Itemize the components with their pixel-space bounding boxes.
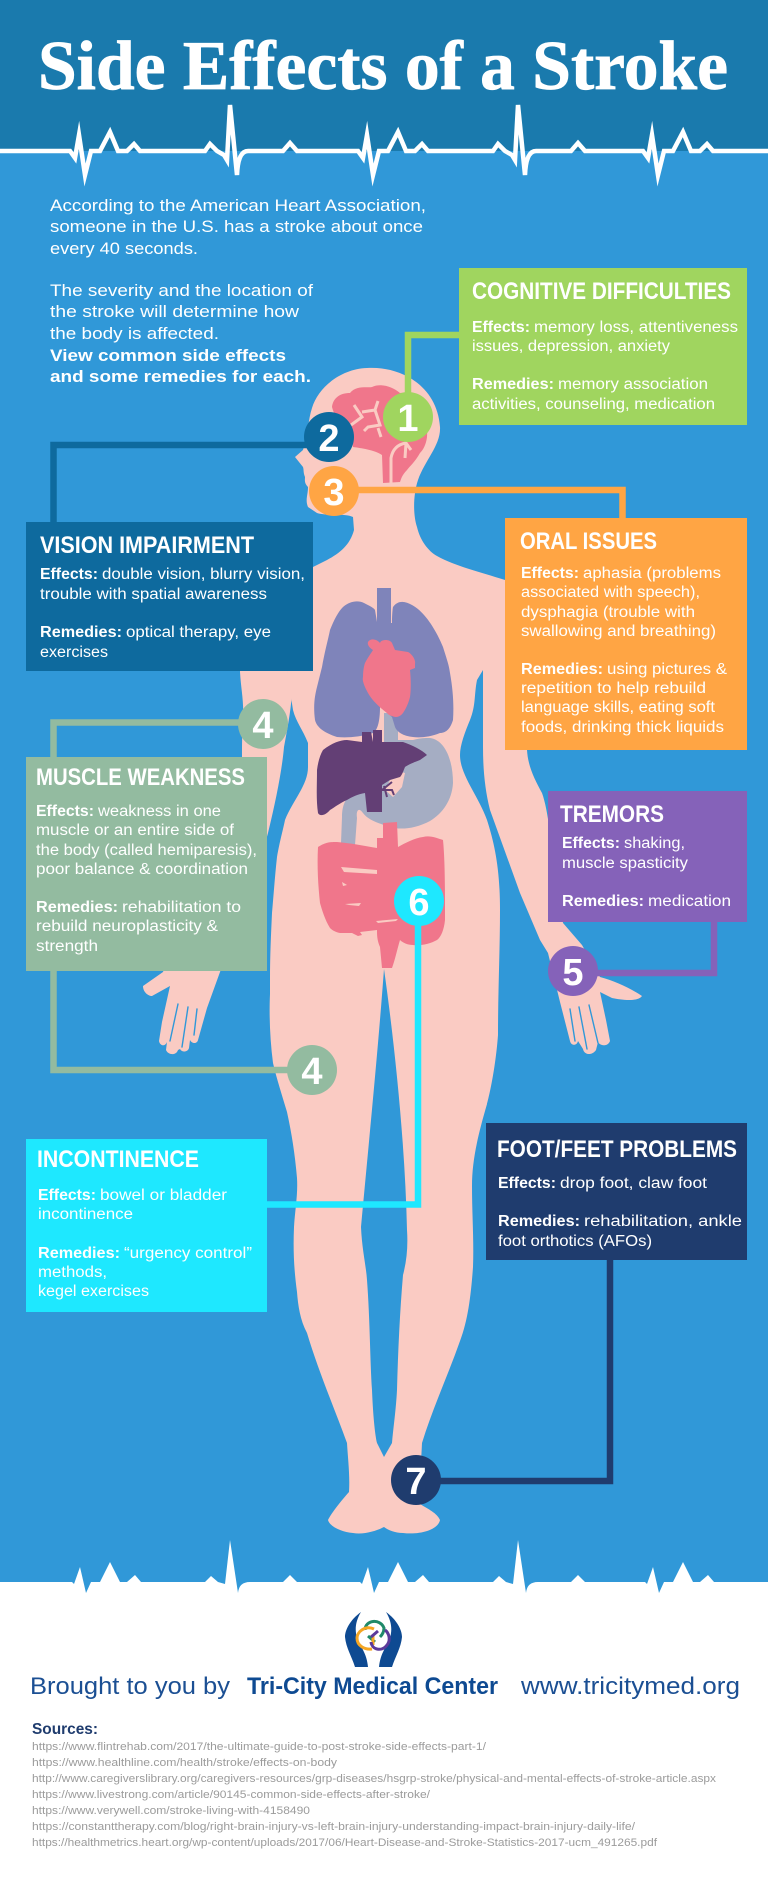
torso, head and legs [270, 368, 505, 1533]
text: effects and remedies: memory association [558, 376, 708, 393]
heartbeat line [0, 105, 768, 175]
header band [0, 0, 768, 151]
intro text: someone in the U.S. has a stroke about once [50, 217, 423, 236]
intro text: According to the American Heart Association, [50, 196, 426, 215]
text: effects and remedies: muscle spasticity [562, 855, 688, 872]
heading: COGNITIVE DIFFICULTIES [472, 278, 731, 305]
left arm [143, 572, 330, 1054]
text: effects and remedies: shaking, [624, 835, 685, 852]
sources: https://www.livestrong.com/article/90145-common-side-effects-after-stroke/ [32, 1789, 431, 1801]
sources: https://constanttherapy.com/blog/right-brain-injury-vs-left-brain-injury-understanding-impact-brain-injury-daily-life/ [32, 1821, 636, 1833]
text: effects and remedies: Effects: [472, 319, 530, 336]
number marker 6: 6 [408, 882, 430, 924]
text: effects and remedies: Remedies: [562, 893, 644, 910]
heading: ORAL ISSUES [520, 528, 657, 555]
sources: https://healthmetrics.heart.org/wp-content/uploads/2017/06/Heart-Disease-and-Stroke-Statistics-2017-ucm_491265.pdf [32, 1837, 658, 1849]
organs [314, 588, 453, 968]
number marker 1: 1 [397, 398, 419, 440]
text: effects and remedies: Remedies: [472, 376, 554, 393]
intro text: the stroke will determine how [50, 302, 300, 321]
text: effects and remedies: Remedies: [521, 661, 603, 678]
text: effects and remedies: incontinence [38, 1206, 133, 1223]
heading: INCONTINENCE [37, 1146, 199, 1173]
text: effects and remedies: swallowing and breathing) [521, 623, 716, 640]
text: effects and remedies: repetition to help rebuild [521, 680, 706, 697]
heading: VISION IMPAIRMENT [40, 532, 254, 559]
number marker 6 [394, 876, 444, 926]
text: effects and remedies: exercises [40, 644, 108, 661]
text: effects and remedies: using pictures & [607, 661, 728, 678]
heart [363, 639, 415, 717]
text: effects and remedies [40, 566, 305, 661]
heading: TREMORS [560, 801, 664, 828]
sources [32, 1721, 717, 1849]
text: effects and remedies: “urgency control” [124, 1245, 252, 1262]
sources: Sources: [32, 1721, 98, 1738]
panel: tremors [548, 791, 747, 922]
intro text: and some remedies for each. [50, 367, 311, 386]
text: effects and remedies: activities, counseling, medication [472, 396, 715, 413]
text: effects and remedies: rebuild neuroplasticity & [36, 918, 219, 935]
text: effects and remedies: trouble with spatial awareness [40, 586, 267, 603]
title: Side Effects of a Stroke [38, 28, 728, 105]
text: effects and remedies [36, 803, 257, 955]
text: effects and remedies: rehabilitation, ankle [584, 1213, 742, 1230]
text: effects and remedies: dysphagia (trouble with [521, 604, 695, 621]
number marker 7: 7 [405, 1461, 427, 1503]
text: effects and remedies: Effects: [40, 566, 98, 583]
text: effects and remedies: foot orthotics (AFOs) [498, 1233, 652, 1250]
sources: https://www.verywell.com/stroke-living-with-4158490 [32, 1805, 310, 1817]
text: effects and remedies: optical therapy, eye [126, 624, 271, 641]
heading: MUSCLE WEAKNESS [36, 764, 245, 791]
footer white area with heartbeat edge [0, 1540, 768, 1878]
text: effects and remedies: medication [648, 893, 731, 910]
text: effects and remedies [38, 1187, 252, 1300]
panel: oral issues [505, 518, 747, 750]
text: effects and remedies: Remedies: [38, 1245, 120, 1262]
text: effects and remedies: memory loss, attentiveness [534, 319, 738, 336]
text: effects and remedies: aphasia (problems [583, 565, 721, 582]
number marker 7 [391, 1455, 441, 1505]
text: effects and remedies: Effects: [36, 803, 94, 820]
brought to you by text: Brought to you by [30, 1673, 230, 1700]
number marker 5: 5 [562, 952, 584, 994]
organization name: Tri-City Medical Center [247, 1673, 498, 1700]
panel: incontinence [26, 1139, 267, 1312]
text: effects and remedies: issues, depression, anxiety [472, 338, 670, 355]
text: effects and remedies: kegel exercises [38, 1283, 149, 1300]
sources: http://www.caregiverslibrary.org/caregivers-resources/grp-diseases/hsgrp-stroke/physical-and-mental-effects-of-stroke-article.aspx [32, 1773, 717, 1785]
number marker 4 upper [238, 699, 288, 749]
text: effects and remedies: drop foot, claw foot [560, 1175, 708, 1192]
number marker 2 [304, 412, 354, 462]
stomach and intestine tube [341, 713, 453, 845]
text: effects and remedies: double vision, blurry vision, [102, 566, 305, 583]
text: effects and remedies [498, 1175, 742, 1250]
text: effects and remedies: associated with speech), [521, 584, 700, 601]
sources: https://www.flintrehab.com/2017/the-ultimate-guide-to-post-stroke-side-effects-part-1/ [32, 1741, 487, 1753]
pink gap near stomach [385, 770, 405, 797]
number marker 3 [309, 466, 359, 516]
intro text: View common side effects [50, 346, 286, 365]
text: effects and remedies: Effects: [38, 1187, 96, 1204]
heading: FOOT/FEET PROBLEMS [497, 1136, 737, 1163]
sources: https://www.healthline.com/health/stroke/effects-on-body [32, 1757, 338, 1769]
panel: muscle weakness [26, 757, 267, 971]
text: effects and remedies: Remedies: [40, 624, 122, 641]
intro text: the body is affected. [50, 324, 219, 343]
text: effects and remedies: Effects: [521, 565, 579, 582]
right arm [450, 575, 642, 1054]
brain [332, 385, 428, 483]
website: www.tricitymed.org [520, 1673, 740, 1700]
text: effects and remedies: weakness in one [97, 803, 221, 820]
text: effects and remedies: Remedies: [36, 899, 118, 916]
number marker 4 upper: 4 [252, 705, 274, 747]
text: effects and remedies: language skills, eating soft [521, 699, 716, 716]
intro text: every 40 seconds. [50, 239, 198, 258]
number marker 5 [548, 946, 598, 996]
text: effects and remedies: Effects: [498, 1175, 556, 1192]
text: effects and remedies [521, 565, 728, 736]
text: effects and remedies: strength [36, 938, 98, 955]
finger gaps [170, 1004, 598, 1049]
text: effects and remedies [562, 835, 731, 910]
connector lines [54, 335, 714, 1481]
number marker 4 lower [287, 1045, 337, 1095]
intro text [50, 196, 426, 386]
text: effects and remedies: Effects: [562, 835, 620, 852]
panel: vision impairment [26, 522, 313, 671]
number marker 1 [383, 392, 433, 442]
intestines [318, 822, 445, 968]
panel: foot/feet problems [486, 1123, 747, 1260]
text: effects and remedies: rehabilitation to [122, 899, 241, 916]
text: effects and remedies: Remedies: [498, 1213, 580, 1230]
text: effects and remedies [472, 319, 738, 413]
logo: hands and rings [345, 1612, 402, 1667]
number marker 4 lower: 4 [301, 1051, 323, 1093]
lungs [314, 588, 453, 737]
human body silhouette [143, 368, 642, 1533]
text: effects and remedies: muscle or an entire side of [36, 822, 235, 839]
number marker 3: 3 [323, 472, 345, 514]
text: effects and remedies: bowel or bladder [100, 1187, 227, 1204]
text: effects and remedies: the body (called hemiparesis), [36, 842, 257, 859]
text: effects and remedies: poor balance & coordination [36, 861, 248, 878]
liver [317, 730, 427, 815]
text: effects and remedies: foods, drinking thick liquids [521, 719, 724, 736]
text: effects and remedies: methods, [38, 1264, 107, 1281]
panel: cognitive difficulties [459, 268, 747, 425]
number marker 2: 2 [318, 418, 340, 460]
intro text: The severity and the location of [50, 281, 313, 300]
